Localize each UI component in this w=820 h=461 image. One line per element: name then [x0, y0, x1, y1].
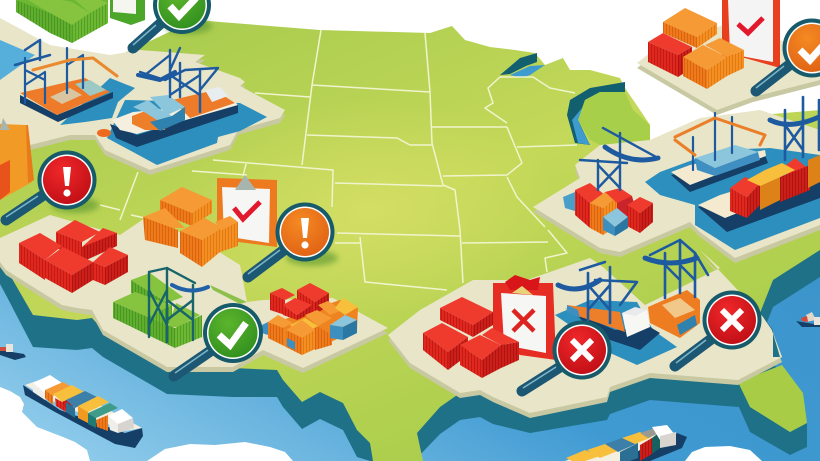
orange container side: [132, 110, 165, 130]
clipboard side: [26, 125, 34, 183]
icon: magnifier red x southeast: [675, 290, 762, 366]
harbor basin left: [60, 78, 135, 125]
lake superior water: [510, 65, 545, 78]
orange deck: [172, 90, 235, 118]
green strip: [210, 285, 247, 304]
panel base: [533, 115, 820, 263]
cargo: [50, 88, 82, 104]
clipboard check: [738, 18, 763, 33]
orange containers: [143, 187, 238, 267]
hull: [570, 433, 687, 461]
small ship right: [796, 312, 820, 327]
hull: [23, 385, 143, 448]
port ship left: [15, 40, 117, 122]
icon: magnifier red x south: [522, 320, 612, 391]
crane: [15, 40, 117, 103]
green containers: [113, 273, 202, 348]
clip: [0, 118, 10, 130]
underlay orange row: [268, 300, 358, 355]
hull: [110, 104, 238, 147]
mixed small containers: [262, 283, 358, 355]
lake michigan: [567, 82, 625, 145]
panel top: [388, 250, 782, 413]
florida cliff: [738, 382, 807, 455]
orange and red containers: [648, 8, 744, 89]
small ship left: [0, 344, 26, 360]
crane blue: [645, 240, 708, 298]
crane: [580, 128, 658, 190]
harbor basin right: [107, 100, 267, 165]
panel base: [388, 255, 782, 418]
cargo ship left: [23, 375, 143, 448]
central highlight: [180, 100, 560, 320]
blue containers: [133, 95, 185, 122]
deck: [565, 430, 677, 461]
green containers: [16, 0, 108, 43]
icon: magnifier green check top: [133, 0, 211, 48]
tug: [97, 129, 111, 137]
stack near crane: [563, 183, 653, 236]
panel top: [0, 18, 285, 170]
clipboard green: [110, 0, 145, 25]
red containers: [19, 220, 128, 293]
panel: southeast: [388, 240, 782, 418]
panel: east ports: [533, 97, 820, 263]
white cargo: [205, 87, 228, 102]
panel: northwest ports: [0, 18, 285, 175]
lake michigan water: [572, 108, 590, 145]
orange clipboard: [217, 175, 277, 247]
left clipboard and box: [0, 118, 34, 200]
harbor water: [555, 300, 677, 365]
clipboard red: [722, 0, 780, 68]
deck: [112, 102, 238, 134]
panel base: [0, 220, 388, 373]
ship with orange crane: [671, 113, 768, 192]
panel base: [0, 23, 285, 175]
red containers: [423, 297, 519, 378]
coastal cliff: [0, 200, 820, 461]
icon: magnifier orange check northeast: [756, 18, 820, 91]
lake superior: [500, 53, 537, 75]
hull: [20, 92, 113, 122]
panel top: [533, 110, 820, 258]
cargo ship bottom right: [565, 425, 687, 461]
clipboard orange: [0, 124, 32, 200]
big ship: [698, 97, 820, 232]
lower michigan: [578, 92, 650, 145]
panel: central and southwest hub: [0, 175, 388, 373]
deck: [25, 378, 142, 431]
blue side: [150, 107, 185, 131]
harbor water: [645, 148, 820, 250]
florida: [738, 365, 807, 432]
panel top: [637, 20, 820, 110]
clipboard red: [493, 275, 556, 360]
icon: magnifier green check south: [174, 303, 263, 376]
crane dark green: [149, 268, 208, 342]
port ship right: [97, 48, 238, 147]
magnifier shadows: [51, 18, 338, 266]
port platform: [648, 290, 700, 338]
cargo blue: [75, 80, 106, 96]
left water top: [0, 22, 70, 92]
panel base: [637, 25, 820, 115]
inner water top-left: [0, 40, 35, 80]
clipboard paper: [728, 0, 773, 62]
icon: magnifier orange exclamation: [248, 202, 334, 277]
icon: magnifier red exclamation: [6, 150, 96, 220]
orange crate: [0, 160, 10, 200]
state borders: [100, 30, 577, 290]
deck: [20, 78, 110, 115]
cliff strip: [763, 317, 780, 357]
crane: [138, 48, 218, 112]
panel: north top-left green: [16, 0, 145, 43]
ship with white cargo: [558, 262, 660, 350]
panel top: [0, 215, 388, 368]
panel: northeast inventory: [637, 0, 820, 115]
